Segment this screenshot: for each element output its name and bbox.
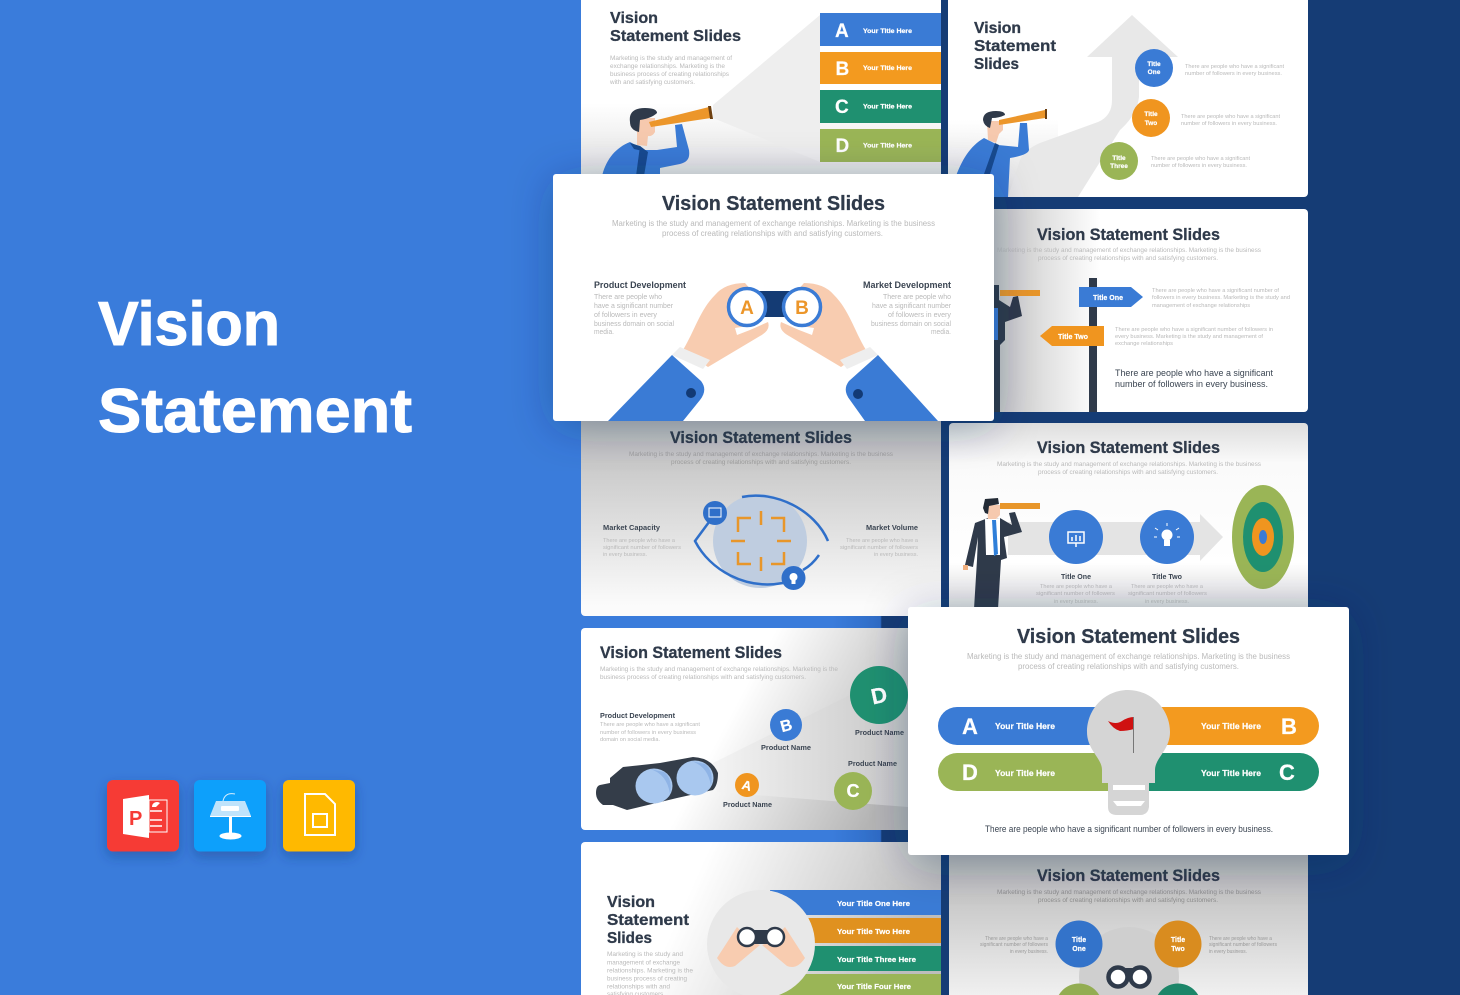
hands and binoculars xyxy=(683,283,866,367)
bar four xyxy=(770,974,941,995)
bottom statement: There are people who have a significant number of followers in every business. xyxy=(985,824,1273,834)
product development: media. xyxy=(594,327,614,336)
circle: title one: Title xyxy=(1147,61,1161,68)
product name labels: Product Name xyxy=(761,745,811,752)
product name labels: Product Name xyxy=(855,730,904,737)
heading: Statement xyxy=(974,38,1057,55)
descriptions: number of followers in every business. xyxy=(1185,71,1282,77)
pill C xyxy=(1119,753,1319,791)
featured slide: light bulb with flag xyxy=(908,607,1349,855)
circle C: C xyxy=(846,781,860,801)
circle: title two: Title xyxy=(1171,937,1185,944)
bar D: Your Title Here xyxy=(863,142,912,150)
heading: Vision xyxy=(610,10,658,27)
title two: There are people who have a xyxy=(1131,584,1204,590)
body text xyxy=(629,451,894,466)
circle: title one xyxy=(1056,920,1102,968)
title one xyxy=(1036,574,1115,605)
market development: of followers in every xyxy=(888,310,951,319)
heading: Statement Slides xyxy=(610,28,741,45)
light bulb with flag xyxy=(1087,690,1170,815)
person with telescope xyxy=(956,109,1047,197)
circle: title three xyxy=(1056,984,1102,995)
heading xyxy=(607,894,690,947)
body text xyxy=(997,889,1262,904)
slide: arrow to target xyxy=(949,423,1308,623)
pill D: Your Title Here xyxy=(995,768,1055,778)
body text: process of creating relationships with and satisfying customers. xyxy=(1038,255,1218,262)
bar C xyxy=(820,90,941,123)
body text xyxy=(607,951,693,995)
market development: business domain on social xyxy=(871,319,951,328)
market volume: in every business. xyxy=(874,552,918,558)
bar two xyxy=(790,918,941,943)
right sleeve xyxy=(840,347,938,421)
market capacity: in every business. xyxy=(603,552,647,558)
left description xyxy=(980,936,1049,955)
circle: title four xyxy=(1154,984,1202,995)
eye graphic xyxy=(695,494,828,590)
circle: title two xyxy=(1154,920,1202,968)
slide: four titles around binoculars xyxy=(949,850,1308,995)
main title xyxy=(98,290,412,446)
person in suit xyxy=(994,285,1040,412)
heading xyxy=(974,20,1057,73)
title two: significant number of followers xyxy=(1128,591,1207,597)
heading: Slides xyxy=(607,930,652,947)
circle: title one xyxy=(1135,49,1173,87)
circle: title three: Three xyxy=(1110,163,1128,170)
left description: in every business. xyxy=(1010,949,1048,955)
bar D: D xyxy=(836,136,849,157)
right description: significant number of followers xyxy=(1209,942,1277,948)
circle D xyxy=(850,666,908,724)
title two: in every business. xyxy=(1145,599,1189,605)
heading: Vision Statement Slides xyxy=(1037,225,1220,244)
descriptions: followers in every business. Marketing is the study and xyxy=(1152,295,1290,301)
pill D xyxy=(938,753,1138,791)
hands and binoculars: B xyxy=(795,298,809,319)
circle D: D xyxy=(869,682,889,709)
pill A xyxy=(938,707,1138,745)
descriptions: number of followers in every business. xyxy=(1151,163,1247,169)
bar D xyxy=(820,129,941,162)
market capacity: Market Capacity xyxy=(603,525,660,532)
body text xyxy=(612,219,935,238)
circle: title one: One xyxy=(1072,946,1086,953)
product development xyxy=(594,280,686,336)
circle: title three: Title xyxy=(1112,155,1126,162)
circle B xyxy=(770,709,802,741)
body text: Marketing is the study and management of xyxy=(610,55,732,62)
slide: signpost xyxy=(994,209,1308,412)
market development: have a significant number xyxy=(872,301,951,310)
pill D: D xyxy=(962,760,978,785)
pill C: C xyxy=(1279,760,1295,785)
bar A xyxy=(820,13,941,46)
sign: title two: Title Two xyxy=(1058,334,1088,341)
left description: significant number of followers xyxy=(980,942,1048,948)
body text: business process of creating relationships xyxy=(610,71,730,78)
body text: with and satisfying customers. xyxy=(609,79,695,86)
descriptions: number of followers in every business. xyxy=(1181,121,1277,127)
circle A xyxy=(735,773,759,797)
title one: in every business. xyxy=(1054,599,1098,605)
heading: Slides xyxy=(974,56,1019,73)
body text xyxy=(997,461,1262,476)
left description: There are people who have a xyxy=(985,936,1049,942)
market development xyxy=(863,280,951,336)
title one: significant number of followers xyxy=(1036,591,1115,597)
main title: Statement xyxy=(98,377,412,446)
product development: domain on social media. xyxy=(600,737,660,743)
main title: Vision xyxy=(98,290,280,359)
descriptions: There are people who have a significant xyxy=(1181,114,1280,120)
market capacity: There are people who have a xyxy=(603,538,676,544)
title one: There are people who have a xyxy=(1040,584,1113,590)
circle: chart icon xyxy=(1049,510,1103,564)
body text: Marketing is the study and management of exchange relationships. Marketing is the business xyxy=(612,219,935,228)
pill B: Your Title Here xyxy=(1201,721,1261,731)
heading xyxy=(610,11,740,42)
heading: Vision Statement Slides xyxy=(1017,626,1240,648)
callout text xyxy=(1115,368,1273,389)
descriptions xyxy=(1151,64,1284,169)
bar A: Your Title Here xyxy=(863,28,912,35)
product development xyxy=(600,713,700,743)
bar one xyxy=(770,890,941,915)
product development: number of followers in every business xyxy=(600,730,696,736)
body text xyxy=(600,666,838,681)
circle: title two: Title xyxy=(1144,111,1158,118)
view cone xyxy=(780,712,908,807)
heading: Vision Statement Slides xyxy=(1037,438,1220,457)
descriptions: There are people who have a significant xyxy=(1151,156,1250,162)
circle: title one: Title xyxy=(1072,937,1086,944)
icon: Google Slides xyxy=(283,780,355,852)
body text: Marketing is the study and management of exchange relationships. Marketing is the business xyxy=(997,889,1262,896)
market development: Market Development xyxy=(863,280,951,290)
body text xyxy=(997,247,1262,262)
circle: title two: Two xyxy=(1145,120,1157,127)
market development: media. xyxy=(931,327,951,336)
market capacity xyxy=(603,525,681,558)
body text: relationships. Marketing is the xyxy=(607,968,693,974)
icon: PowerPoint xyxy=(107,780,179,852)
pill B: B xyxy=(1281,714,1297,739)
bar C: C xyxy=(835,97,849,118)
hands and binoculars: A xyxy=(740,298,754,319)
cone of view xyxy=(713,15,820,124)
circle: title two: Two xyxy=(1171,946,1185,953)
circle B: B xyxy=(779,717,794,736)
body text xyxy=(609,55,732,86)
callout text: number of followers in every business. xyxy=(1115,379,1268,389)
arrow xyxy=(1008,514,1223,561)
product development: There are people who xyxy=(594,292,662,301)
heading: Vision Statement Slides xyxy=(670,428,852,447)
person in suit xyxy=(963,498,1040,609)
circle: title two xyxy=(1132,99,1170,137)
signpost pole xyxy=(1089,278,1097,414)
circle: bulb icon xyxy=(1140,510,1194,564)
sign: title two xyxy=(1040,326,1104,346)
product name labels xyxy=(723,730,904,809)
heading: Vision xyxy=(974,20,1021,37)
market volume: Market Volume xyxy=(866,525,918,532)
bar two: Your Title Two Here xyxy=(837,927,910,936)
pill A: A xyxy=(962,714,978,739)
circle with hands and binoculars xyxy=(707,890,815,995)
product name labels: Product Name xyxy=(848,761,897,768)
left sleeve xyxy=(608,347,710,421)
body text: process of creating relationships with and satisfying customers. xyxy=(662,229,883,238)
sign: title one xyxy=(1079,287,1143,307)
heading: Vision Statement Slides xyxy=(1037,866,1220,885)
market volume: There are people who have a xyxy=(846,538,919,544)
heading: Vision xyxy=(607,894,655,911)
descriptions xyxy=(1115,288,1290,347)
body text: Marketing is the study and xyxy=(607,951,683,958)
icon: Keynote xyxy=(194,780,266,852)
binoculars xyxy=(596,757,718,810)
body text: business process of creating relationships with and satisfying customers. xyxy=(600,674,806,681)
body text: process of creating relationships with and satisfying customers. xyxy=(1018,662,1239,671)
central circle xyxy=(1079,927,1179,995)
body text: management of exchange xyxy=(607,960,680,966)
descriptions: There are people who have a significant xyxy=(1185,64,1284,70)
slide: eye with target xyxy=(581,416,941,616)
circle: title one: One xyxy=(1148,69,1161,76)
body text: Marketing is the study and management of exchange relationships. Marketing is the business xyxy=(997,247,1262,254)
title two: Title Two xyxy=(1152,574,1182,581)
target xyxy=(1232,485,1294,589)
bar A: A xyxy=(835,21,849,42)
body text: Marketing is the study and management of exchange relationships. Marketing is the xyxy=(600,666,838,673)
product development: Product Development xyxy=(594,280,686,290)
growth arrow xyxy=(1008,15,1178,197)
bar three: Your Title Three Here xyxy=(837,955,916,964)
slide: binocular vision cone with A B C D bars xyxy=(581,0,941,176)
product development: of followers in every xyxy=(594,310,657,319)
heading: Statement xyxy=(607,912,690,929)
body text: process of creating relationships with and satisfying customers. xyxy=(1038,897,1218,904)
product development: business domain on social xyxy=(594,319,674,328)
slide: arrow path with three titles xyxy=(948,0,1308,197)
descriptions: exchange relationships xyxy=(1115,341,1173,347)
pill C: Your Title Here xyxy=(1201,768,1261,778)
product development: Product Development xyxy=(600,713,676,720)
icon: PowerPoint: P xyxy=(129,808,142,830)
body text: relationships with and xyxy=(607,984,670,990)
body text: exchange relationships. Marketing is the xyxy=(610,63,725,70)
bar B xyxy=(820,52,941,84)
bar three xyxy=(790,946,941,971)
person with telescope xyxy=(602,106,713,176)
circle A: A xyxy=(740,777,754,794)
pill A: Your Title Here xyxy=(995,721,1055,731)
descriptions: There are people who have a significant number of xyxy=(1152,288,1279,294)
circle C xyxy=(834,772,872,810)
title one: Title One xyxy=(1061,574,1091,581)
featured slide: binocular hands xyxy=(553,174,994,421)
circle: title three xyxy=(1100,142,1138,180)
binoculars icon xyxy=(1108,968,1150,986)
heading: Vision Statement Slides xyxy=(662,193,885,215)
right description: There are people who have a xyxy=(1209,936,1273,942)
product development: have a significant number xyxy=(594,301,673,310)
body text: process of creating relationships with and satisfying customers. xyxy=(671,459,851,466)
market volume xyxy=(840,525,919,558)
body text xyxy=(967,652,1290,671)
pill B xyxy=(1119,707,1319,745)
product name labels: Product Name xyxy=(723,802,772,809)
body text: business process of creating xyxy=(607,976,687,982)
body text: Marketing is the study and management of exchange relationships. Marketing is the business xyxy=(997,461,1262,468)
app icons xyxy=(107,780,355,852)
descriptions: management of exchange relationships xyxy=(1152,303,1250,309)
bar B: B xyxy=(836,59,849,80)
callout text: There are people who have a significant xyxy=(1115,368,1273,378)
market development: There are people who xyxy=(883,292,951,301)
product development: There are people who have a significant xyxy=(600,722,700,728)
body text: Marketing is the study and management of exchange relationships. Marketing is the business xyxy=(629,451,894,458)
sign: title one: Title One xyxy=(1093,295,1123,302)
right description xyxy=(1209,936,1277,955)
body text: process of creating relationships with and satisfying customers. xyxy=(1038,469,1218,476)
market volume: significant number of followers xyxy=(840,545,918,551)
bar C: Your Title Here xyxy=(863,104,912,110)
title two xyxy=(1128,574,1207,605)
descriptions: every business. Marketing is the study and management of xyxy=(1115,334,1263,340)
body text: Marketing is the study and management of exchange relationships. Marketing is the business xyxy=(967,652,1290,661)
bar four: Your Title Four Here xyxy=(837,982,911,991)
market capacity: significant number of followers xyxy=(603,545,681,551)
slide: binoculars with product circles xyxy=(581,628,941,830)
heading: Vision Statement Slides xyxy=(600,643,782,662)
bar one: Your Title One Here xyxy=(837,899,910,908)
slide: four stacked titles with binocular hands xyxy=(581,842,941,995)
descriptions: There are people who have a significant number of followers in xyxy=(1115,327,1273,333)
right description: in every business. xyxy=(1209,949,1247,955)
bar B: Your Title Here xyxy=(863,65,912,72)
